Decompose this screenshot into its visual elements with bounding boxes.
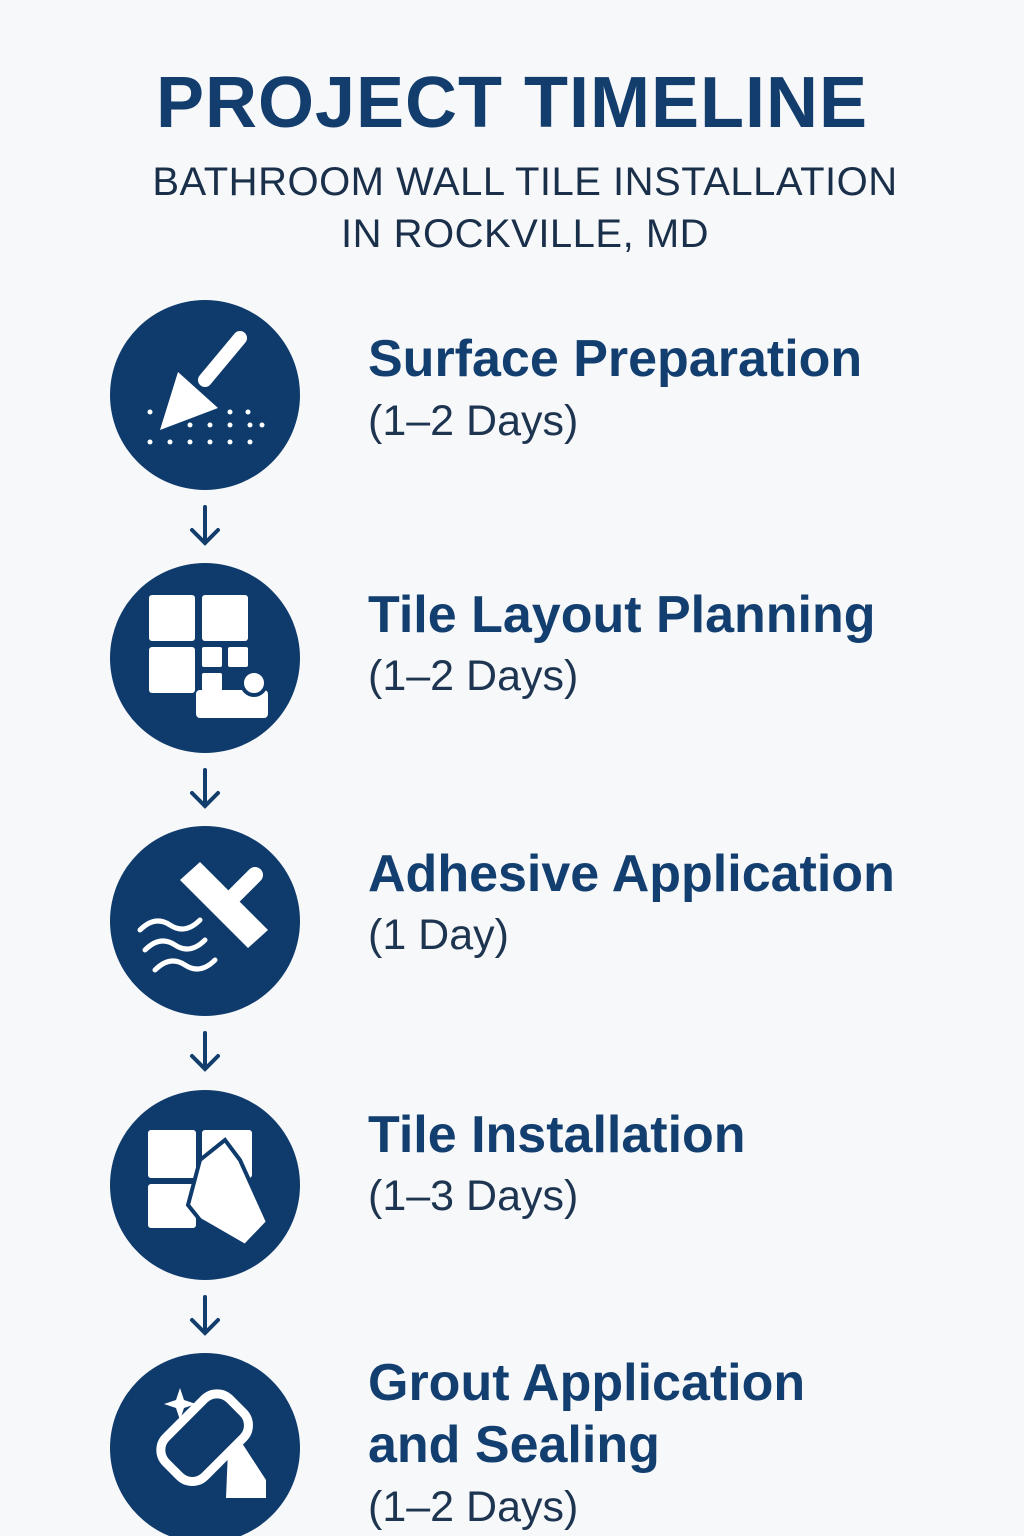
text: Surface Preparation xyxy=(368,330,862,388)
arrow xyxy=(192,770,218,806)
arrow xyxy=(192,507,218,543)
text: Grout Application xyxy=(368,1354,805,1412)
step 5 text xyxy=(368,1354,805,1531)
step 1 text xyxy=(368,330,862,445)
icon: grout xyxy=(110,1353,300,1536)
icon: trowel xyxy=(110,300,300,490)
step 3 text xyxy=(368,845,895,959)
text: (1 Day) xyxy=(368,911,509,959)
subtitle: BATHROOM WALL TILE INSTALLATION xyxy=(152,160,898,204)
arrow xyxy=(192,1297,218,1333)
timeline icons xyxy=(110,300,300,1536)
subtitle xyxy=(152,160,898,256)
text: Tile Installation xyxy=(368,1106,746,1164)
text: Tile Layout Planning xyxy=(368,586,876,644)
icon: tile layout xyxy=(110,563,300,753)
subtitle: IN ROCKVILLE, MD xyxy=(341,212,709,256)
text: Adhesive Application xyxy=(368,845,895,903)
title: PROJECT TIMELINE xyxy=(156,63,868,143)
arrow xyxy=(192,1033,218,1069)
text: (1–2 Days) xyxy=(368,1483,578,1531)
step 2 text xyxy=(368,586,876,700)
step 4 text xyxy=(368,1106,746,1220)
text: and Sealing xyxy=(368,1416,660,1474)
icon: tile installation xyxy=(110,1090,300,1280)
text: (1–2 Days) xyxy=(368,652,578,700)
text: (1–2 Days) xyxy=(368,397,578,445)
text: (1–3 Days) xyxy=(368,1172,578,1220)
icon: adhesive xyxy=(110,826,300,1016)
